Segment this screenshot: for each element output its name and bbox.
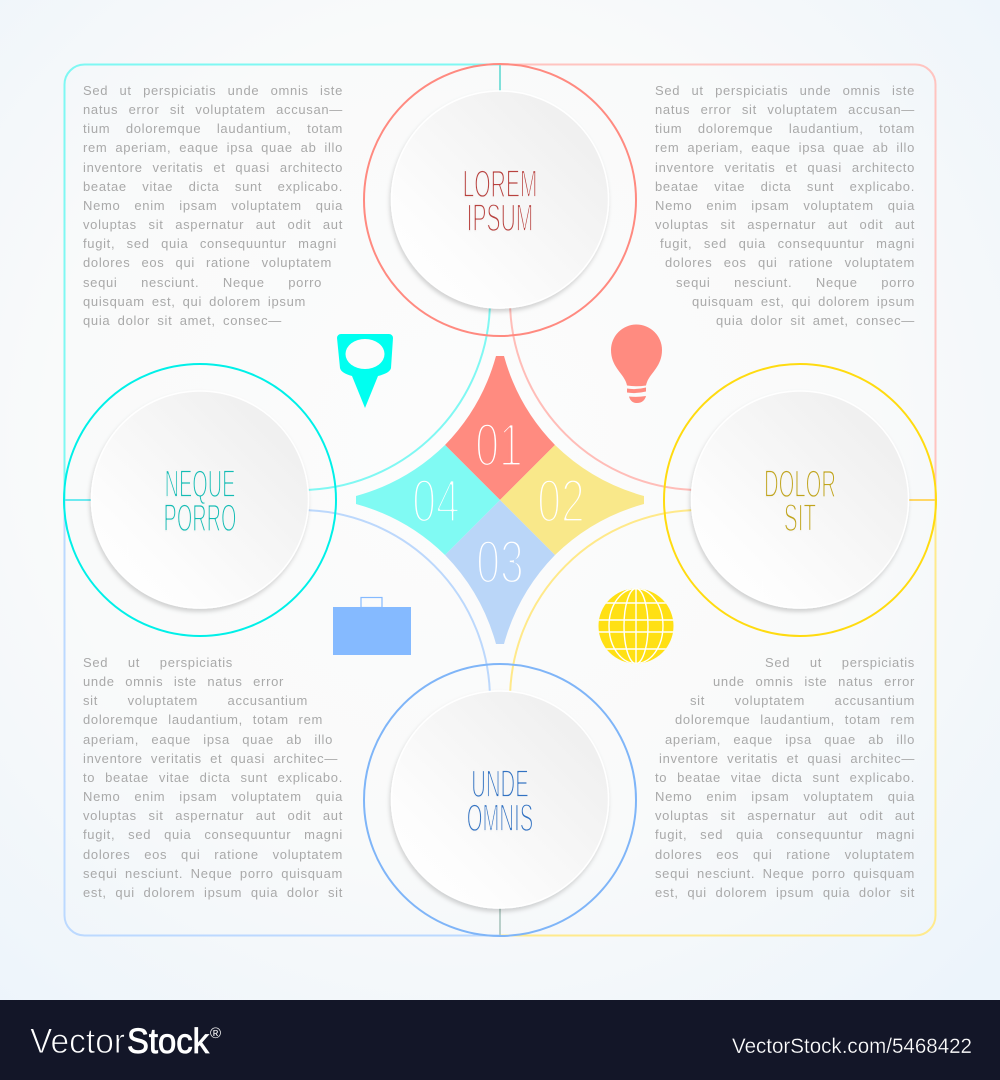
footer logo: ® <box>210 1025 221 1042</box>
plate: unde omnis: OMNIS <box>467 796 533 840</box>
text block: top left: Nemo enim ipsam voluptatem quia <box>83 198 343 213</box>
text block: top left: inventore veritatis et quasi architecto <box>83 160 343 175</box>
text block: top right: inventore veritatis et quasi architecto <box>655 160 915 175</box>
text block: top right: dolores eos qui ratione voluptatem <box>665 255 915 270</box>
text block: bottom right: Sed ut perspiciatis <box>765 655 915 670</box>
text block: top right: rem aperiam, eaque ipsa quae ab illo <box>655 140 915 155</box>
text block: top left: fugit, sed quia consequuntur magni <box>83 236 337 251</box>
plate: neque porro <box>92 391 308 608</box>
text block: top right: Sed ut perspiciatis unde omnis iste <box>655 83 915 98</box>
plate: dolor sit <box>692 391 908 608</box>
text block: bottom left: Sed ut perspiciatis <box>83 655 233 670</box>
text block: top left: tium doloremque laudantium, totam <box>83 121 343 136</box>
central star <box>356 356 644 644</box>
text block: top right: natus error sit voluptatem accusan— <box>655 102 915 117</box>
text block: bottom right: Nemo enim ipsam voluptatem quia <box>655 789 915 804</box>
text block: bottom right: doloremque laudantium, totam rem <box>675 712 915 727</box>
text block: top right: beatae vitae dicta sunt explicabo. <box>655 179 915 194</box>
quadrant 01 <box>445 356 555 500</box>
quadrant 01: 01 <box>475 412 523 480</box>
text block: top left <box>83 83 343 328</box>
text block: bottom right: sit voluptatem accusantium <box>690 693 915 708</box>
text block: top right: Nemo enim ipsam voluptatem quia <box>655 198 915 213</box>
text block: top right: fugit, sed quia consequuntur magni <box>660 236 915 251</box>
text block: bottom left: dolores eos qui ratione voluptatem <box>83 847 343 862</box>
footer logo: Stock <box>127 1022 209 1061</box>
text block: top left: beatae vitae dicta sunt explicabo. <box>83 179 343 194</box>
outer rings <box>64 64 936 936</box>
text block: bottom right: fugit, sed quia consequuntur magni <box>655 827 915 842</box>
footer logo: Vector <box>30 1022 125 1061</box>
plate: unde omnis: UNDE <box>471 762 529 806</box>
text block: top right: sequi nesciunt. Neque porro <box>676 275 915 290</box>
quadrant 03 <box>445 500 555 644</box>
text block: top left: sequi nesciunt. Neque porro <box>83 275 322 290</box>
text block: bottom left: aperiam, eaque ipsa quae ab illo <box>83 732 333 747</box>
footer url: VectorStock.com/5468422 <box>732 1035 972 1058</box>
text block: top right: tium doloremque laudantium, totam <box>655 121 915 136</box>
text block: bottom right: est, qui dolorem ipsum quia dolor sit <box>655 885 915 900</box>
text block: top left: Sed ut perspiciatis unde omnis iste <box>83 83 343 98</box>
text block: bottom right: to beatae vitae dicta sunt explicabo. <box>655 770 915 785</box>
text block: bottom right: dolores eos qui ratione voluptatem <box>655 847 915 862</box>
text block: top right: quia dolor sit amet, consec— <box>716 313 915 328</box>
plate: unde omnis <box>392 691 608 908</box>
quadrant 02 <box>500 445 644 555</box>
plate: lorem ipsum: IPSUM <box>467 196 533 240</box>
text block: bottom left: est, qui dolorem ipsum quia dolor sit <box>83 885 343 900</box>
text block: top left: quisquam est, qui dolorem ipsum <box>83 294 306 309</box>
icon: globe <box>598 588 674 664</box>
plate: neque porro: NEQUE <box>165 462 235 506</box>
plate: dolor sit: SIT <box>784 496 816 540</box>
quadrant 04: 04 <box>412 468 460 536</box>
footer logo <box>30 1022 221 1061</box>
text block: top right: quisquam est, qui dolorem ipsum <box>692 294 915 309</box>
text block: bottom right <box>655 655 915 900</box>
frame: four coloured rounded corners <box>64 64 936 936</box>
text block: bottom left: sequi nesciunt. Neque porro quisquam <box>83 866 343 881</box>
text block: top left: rem aperiam, eaque ipsa quae ab illo <box>83 140 343 155</box>
text block: bottom left: Nemo enim ipsam voluptatem quia <box>83 789 343 804</box>
text block: top left: quia dolor sit amet, consec— <box>83 313 282 328</box>
text block: bottom left: doloremque laudantium, totam rem <box>83 712 323 727</box>
text block: bottom left: to beatae vitae dicta sunt explicabo. <box>83 770 343 785</box>
text block: bottom left: sit voluptatem accusantium <box>83 693 308 708</box>
text block: bottom right: aperiam, eaque ipsa quae ab illo <box>665 732 915 747</box>
text block: bottom left: voluptas sit aspernatur aut odit aut <box>83 808 343 823</box>
text block: bottom left: unde omnis iste natus error <box>83 674 284 689</box>
text block: top right <box>655 83 915 328</box>
plate: lorem ipsum <box>392 91 608 308</box>
text block: top left: natus error sit voluptatem accusan— <box>83 102 343 117</box>
text block: bottom right: voluptas sit aspernatur aut odit aut <box>655 808 915 823</box>
text block: bottom left <box>83 655 343 900</box>
plate: neque porro: PORRO <box>164 496 236 540</box>
text block: bottom right: inventore veritatis et quasi architec— <box>659 751 915 766</box>
quadrant 04 <box>356 445 500 555</box>
plate: lorem ipsum: LOREM <box>463 162 537 206</box>
text block: bottom left: fugit, sed quia consequuntur magni <box>83 827 343 842</box>
icon: light bulb <box>611 324 662 403</box>
quadrant 02: 02 <box>537 468 585 536</box>
text block: bottom right: sequi nesciunt. Neque porro quisquam <box>655 866 915 881</box>
text block: bottom left: inventore veritatis et quasi architec— <box>83 751 338 766</box>
connector arcs <box>300 300 700 700</box>
text block: top left: dolores eos qui ratione voluptatem <box>83 255 332 270</box>
plate: dolor sit: DOLOR <box>764 462 836 506</box>
text block: top right: voluptas sit aspernatur aut odit aut <box>655 217 915 232</box>
icon: map pin <box>337 334 393 408</box>
text block: top left: voluptas sit aspernatur aut odit aut <box>83 217 343 232</box>
text block: bottom right: unde omnis iste natus error <box>713 674 915 689</box>
footer bar <box>0 1000 1000 1080</box>
tick marks <box>65 65 935 935</box>
quadrant 03: 03 <box>476 529 524 597</box>
icon: briefcase <box>333 598 411 655</box>
